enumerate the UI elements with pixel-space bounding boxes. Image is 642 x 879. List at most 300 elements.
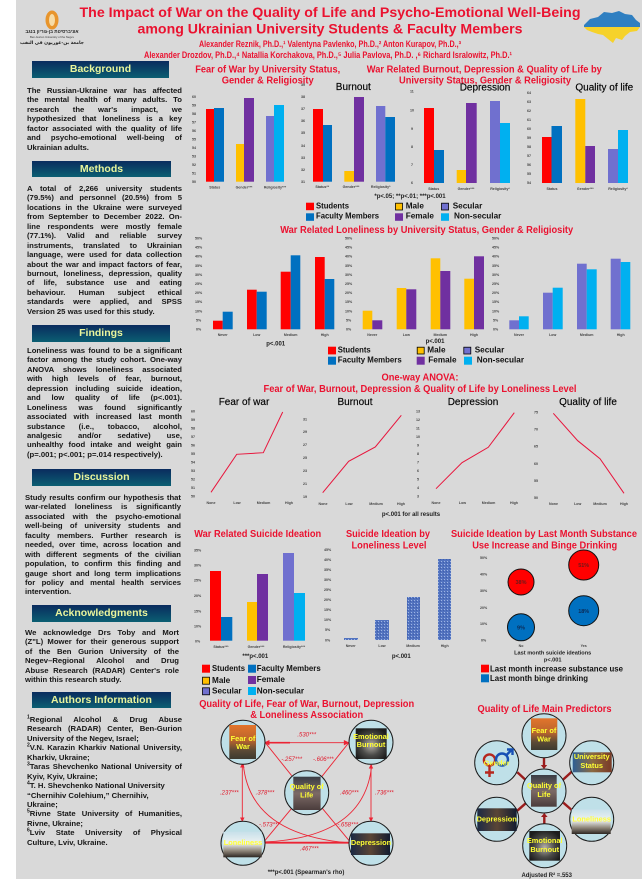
heading: suicide ideation by loneliness	[346, 529, 430, 552]
node: gender: Gender	[484, 758, 510, 768]
bubble chart: suicide ideation by substance use: 30%	[480, 589, 488, 593]
text: author affiliations: 1Regional Alcohol & Drug Abuse	[27, 714, 182, 724]
text: background paragraph: factor associated with the quality of life	[27, 124, 182, 133]
node: quality of life: Quality of	[527, 781, 562, 790]
text: methods paragraph: Version 25 was used for this study.	[27, 307, 155, 316]
line chart: quality of life: Medium	[593, 502, 607, 506]
bar chart: quality of life: 62	[527, 109, 531, 113]
bar chart: quality of life: 60	[527, 127, 531, 131]
node: emotional burnout: Emotional	[527, 836, 563, 845]
text: findings paragraph: Loneliness was found to be a significant	[27, 346, 182, 355]
bar chart: loneliness by gender: 20%	[345, 291, 353, 295]
text: discussion paragraph: faculty members. Further research is	[25, 531, 181, 540]
chart title: Depression	[460, 82, 510, 94]
legend: suicide ideation: Secular	[212, 686, 242, 696]
bubble chart: suicide ideation by substance use: Yes	[581, 644, 587, 648]
chart title: Depression	[448, 397, 498, 408]
text: acknowledgments paragraph: We acknowledge Drs Toby and Mort	[25, 628, 179, 637]
node: loneliness: Loneliness	[572, 814, 611, 824]
bar chart: loneliness by religiosity: 15%	[492, 300, 500, 304]
bar chart: suicide ideation: 15%	[194, 610, 202, 614]
bar chart: quality of life: 58	[527, 145, 531, 149]
node: university status: University	[574, 752, 610, 761]
bar chart: loneliness by gender: Low	[403, 333, 410, 337]
bar chart: fear of war: 54	[192, 146, 196, 150]
legend: loneliness charts	[328, 346, 525, 365]
bar chart: loneliness by religiosity: Medium	[580, 333, 593, 337]
text: author affiliations: Research (RADAR) Center, Ben-Gurion	[27, 724, 182, 733]
text: methods paragraph: A total of 2,266 university students	[27, 184, 182, 193]
section bar: Methods: Methods	[80, 163, 123, 175]
line chart: depression	[416, 397, 518, 505]
bar chart: suicide ideation by loneliness: Never	[346, 644, 356, 648]
bar chart: loneliness by religiosity: 5%	[493, 318, 499, 322]
node: emotional burnout: Burnout	[530, 845, 560, 854]
text: author affiliations: 3Taras Shevchenko National University of	[27, 762, 182, 771]
section bar: Authors Information	[32, 692, 171, 708]
text: findings paragraph: associated with increased last month	[27, 412, 182, 421]
correlation values: .467***	[300, 846, 319, 852]
heading: burnout depression quality of life charts	[367, 64, 602, 86]
node: fear of war: Fear of	[532, 726, 557, 735]
bar chart: loneliness by status: 20%	[195, 291, 203, 295]
section bar: Findings: Findings	[79, 327, 123, 339]
bar chart: loneliness by religiosity: High	[617, 333, 625, 337]
section bar: Background: Background	[70, 63, 131, 75]
icon: flame emblem	[46, 10, 58, 30]
legend: top charts: Male	[406, 202, 424, 210]
bubble chart: suicide ideation by substance use: p<.001	[544, 657, 561, 663]
section bar: Discussion	[32, 469, 171, 486]
note: Spearman: ***p<.001 (Spearman's rho)	[268, 870, 344, 876]
text: author affiliations: Culture, Lviv, Ukraine.	[27, 838, 108, 847]
heading: one-way ANOVA: One-way ANOVA:	[382, 372, 458, 384]
correlation values	[220, 732, 394, 852]
bar chart: fear of war: Religiosity***	[264, 186, 287, 190]
text: discussion paragraph: with different segments of the civilian	[25, 550, 181, 559]
heading: fear of war chart: Fear of War by University Status,	[195, 64, 340, 76]
line chart: burnout: 27	[303, 443, 307, 447]
text: discussion paragraph: war-related loneliness is significantly	[25, 502, 181, 511]
correlation values: .237***	[220, 790, 239, 796]
line chart: fear of war: 57	[191, 435, 195, 439]
bar chart: burnout	[301, 82, 395, 189]
text: author affiliations: 5Rivne State University of Humanities,	[27, 809, 182, 818]
bar chart: loneliness by gender: Never	[367, 333, 378, 337]
bar chart: depression: Religiosity*	[490, 187, 510, 191]
logo: Ben-Gurion University: جامعة بن-غوريون في النقب	[20, 41, 84, 46]
bar chart: loneliness by status: 25%	[195, 282, 203, 286]
line chart: fear of war: 60	[191, 410, 195, 414]
text: findings paragraph: depression including suicide ideation,	[27, 384, 182, 393]
text: author affiliations: Rivne, Ukraine;	[27, 819, 83, 828]
heading: suicide ideation by loneliness: Loneliness Level	[352, 540, 427, 552]
bar chart: loneliness by gender: 15%	[345, 300, 353, 304]
node: quality of life: Quality of	[290, 782, 324, 791]
bubble chart: suicide ideation by substance use: 20%	[480, 606, 488, 610]
bar chart: loneliness by gender: High	[470, 333, 478, 337]
text: acknowledgments paragraph: Negev–Regional Alcohol and Drug	[25, 656, 179, 665]
node: fear of war	[221, 720, 265, 764]
text: findings paragraph: factor among the study cohort. One-way	[27, 355, 182, 364]
heading: suicide ideation: War Related Suicide Ideation	[194, 529, 321, 540]
bar chart: fear of war: 56	[192, 129, 196, 133]
bar chart: loneliness by religiosity: Never	[514, 333, 525, 337]
line chart: depression: Medium	[482, 501, 495, 505]
chart title: Quality of life	[559, 397, 617, 408]
bubble chart: suicide ideation by substance use	[480, 550, 599, 663]
line chart: depression: 5	[417, 478, 419, 482]
line chart: depression: 11	[416, 426, 420, 430]
text: methods paragraph: (79.5%) and personnel (20.5%) from 5	[27, 193, 182, 202]
bar chart: burnout: 35	[301, 131, 305, 135]
bar chart: quality of life: Status	[547, 187, 557, 191]
node: emotional burnout	[349, 720, 393, 764]
node: university status: Status	[580, 761, 603, 770]
line chart: burnout: Medium	[369, 502, 383, 506]
node: quality of life	[522, 769, 566, 813]
p value: status: p<.001	[266, 342, 286, 348]
line chart: quality of life: 65	[534, 444, 538, 448]
bar chart: loneliness by gender: Medium	[434, 333, 447, 337]
section bar: Findings	[32, 325, 170, 342]
legend: suicide ideation: Students	[212, 664, 245, 673]
line chart: depression: High	[510, 501, 518, 505]
bar chart: suicide ideation by loneliness: 45%	[324, 548, 332, 552]
icon: female and male symbols	[484, 750, 512, 777]
text: methods paragraph: line respondents were mostly female	[27, 222, 182, 231]
bar chart: suicide ideation: 30%	[194, 564, 202, 568]
correlation values: -.606***	[313, 757, 334, 763]
legend: loneliness charts: Faculty Members	[338, 356, 402, 364]
node: fear of war: War	[236, 742, 250, 751]
line chart: fear of war: 59	[191, 418, 195, 422]
legend: substance use: Last month binge drinking	[490, 674, 588, 683]
line chart: depression: 7	[417, 460, 419, 464]
line chart: depression: 13	[416, 410, 420, 414]
text: methods paragraph: behaviour. Human subject ethical	[27, 288, 182, 297]
bar chart: loneliness by status	[195, 236, 334, 337]
text: acknowledgments paragraph: within this research study.	[25, 675, 121, 684]
authors	[144, 39, 512, 60]
bar chart: burnout: 37	[301, 107, 305, 111]
chart title: Burnout	[336, 82, 371, 93]
legend: suicide ideation: Non-secular	[257, 686, 305, 696]
bar chart: burnout: 31	[301, 180, 305, 184]
bar chart: suicide ideation by loneliness: 15%	[324, 608, 332, 612]
bar chart: fear of war: 60	[192, 95, 196, 99]
line chart: burnout: 21	[303, 482, 307, 486]
chart title: Quality of life	[575, 82, 634, 94]
bar chart: loneliness by religiosity: 20%	[492, 291, 500, 295]
bar chart: burnout: Religiosity*	[371, 185, 391, 189]
node: depression	[475, 797, 519, 841]
bar chart: loneliness by gender: 35%	[345, 264, 353, 268]
line chart: burnout: High	[397, 502, 405, 506]
heading: burnout depression quality of life charts: University Status, Gender & Religiosity	[399, 76, 571, 86]
text: background paragraph: Ukrainian adults.	[27, 143, 89, 152]
node: quality of life: Life	[300, 790, 313, 800]
text: author affiliations: University of the Negev, Israel;	[27, 734, 139, 743]
bar chart: burnout: 36	[301, 119, 305, 123]
bar chart: loneliness by religiosity: 30%	[492, 273, 500, 277]
bar chart: fear of war: 50	[192, 180, 196, 184]
bar chart: suicide ideation: 35%	[194, 548, 202, 552]
text: methods paragraph: locations in the Ukraine were surveyed	[27, 203, 182, 212]
line chart: depression: None	[432, 501, 440, 505]
bar chart: burnout: 33	[301, 156, 305, 160]
text: discussion paragraph: needed, over time, across location and	[25, 540, 181, 549]
text: findings paragraph: ANOVA shows loneliness associated	[27, 365, 182, 374]
bar chart: loneliness by gender	[345, 236, 484, 337]
legend: top charts: Female	[406, 212, 434, 221]
node: loneliness	[570, 797, 614, 841]
text: discussion paragraph: for policy and mental health services	[25, 578, 181, 587]
bar chart: quality of life: 61	[527, 118, 531, 122]
bar chart: loneliness by religiosity: Low	[549, 333, 556, 337]
bar chart: fear of war	[192, 95, 287, 190]
heading: substance use and binge drinking: Use Increase and Binge Drinking	[472, 540, 617, 552]
legend: loneliness charts: Male	[427, 346, 446, 354]
bar chart: quality of life: 64	[527, 91, 531, 95]
section bar: Authors Information: Authors Information	[51, 694, 152, 706]
node: fear of war	[522, 714, 566, 758]
bubble chart: suicide ideation by substance use: 18%	[578, 609, 589, 615]
bar chart: quality of life	[527, 82, 634, 191]
bar chart: depression	[410, 82, 510, 191]
node: loneliness: Loneliness	[224, 838, 262, 847]
text: background paragraph: research the war's impact, we	[27, 105, 182, 114]
text: author affiliations: 2V.N. Karazin Kharkiv National University,	[27, 743, 182, 752]
logo: Ben-Gurion University: אוניברסיטת בן-גוריון בנגב	[25, 29, 79, 34]
line chart: depression: 9	[417, 444, 419, 448]
node: emotional burnout: Burnout	[357, 740, 386, 749]
text: methods paragraph: burnout, loneliness, depression, quality	[27, 269, 182, 278]
chart title: Burnout	[337, 397, 373, 408]
bar chart: depression: 9	[411, 127, 413, 131]
legend: loneliness charts: Students	[338, 346, 371, 354]
bar chart: quality of life: Gender***	[577, 187, 594, 191]
bar chart: quality of life: Religiosity*	[608, 187, 628, 191]
bar chart: loneliness by religiosity: 25%	[492, 282, 500, 286]
text: author affiliations: Ukraine;	[27, 800, 58, 809]
bar chart: burnout: 39	[301, 83, 305, 87]
bar chart: fear of war: 58	[192, 112, 196, 116]
text: discussion paragraph: population, to confirm this finding and	[25, 559, 181, 568]
bar chart: depression: Status	[428, 187, 439, 191]
text: methods paragraph	[27, 184, 182, 316]
text: author affiliations: Kharkiv, Ukraine;	[27, 753, 90, 762]
bar chart: burnout: 38	[301, 95, 305, 99]
line chart: fear of war: Medium	[257, 501, 270, 505]
bar chart: loneliness by gender: 40%	[345, 255, 353, 259]
bar chart: loneliness by status: 50%	[195, 236, 203, 240]
correlation values: .378***	[256, 790, 275, 796]
line chart: burnout: 25	[303, 456, 307, 460]
bar chart: quality of life: 57	[527, 154, 531, 158]
text: findings paragraph	[27, 346, 182, 459]
bar chart: loneliness by status: 5%	[196, 318, 202, 322]
line chart: fear of war: 56	[191, 444, 195, 448]
line chart: fear of war: 52	[191, 478, 195, 482]
text: methods paragraph: standards were applied, and SPSS	[27, 297, 182, 306]
icon: Ukraine flag map	[584, 11, 640, 43]
bar chart: loneliness by status: Low	[253, 333, 260, 337]
bar chart: loneliness by religiosity: 40%	[492, 255, 500, 259]
section bar: Background	[32, 61, 169, 78]
line chart: fear of war: 53	[191, 469, 195, 473]
bar chart: fear of war: 59	[192, 104, 196, 108]
bar chart: suicide ideation by loneliness: 35%	[324, 568, 332, 572]
text: discussion paragraph: Study results confirm our hypothesis that	[25, 493, 181, 502]
title: The Impact of War on the Quality of Life and Psycho-Emotional Well-Being	[80, 5, 580, 20]
text: discussion paragraph: intervention.	[25, 587, 71, 596]
bar chart: suicide ideation by loneliness: 0%	[325, 638, 331, 642]
text: author affiliations: 4T. H. Shevchenko National University	[27, 780, 165, 790]
section bar: Methods	[32, 161, 171, 177]
bar chart: suicide ideation: Gender***	[248, 645, 265, 649]
legend: suicide ideation: Faculty Members	[257, 664, 321, 673]
line chart: quality of life: 75	[534, 410, 538, 414]
heading: one-way ANOVA: Fear of War, Burnout, Depression & Quality of Life by Loneliness Level	[264, 384, 577, 395]
node: fear of war: War	[537, 734, 551, 744]
bar chart: loneliness by gender: 45%	[345, 246, 353, 250]
section bar: Discussion: Discussion	[73, 471, 130, 483]
bar chart: fear of war: 55	[192, 138, 196, 142]
bar chart: suicide ideation: 10%	[194, 624, 202, 628]
logo: Ben-Gurion University: Ben-Gurion University of the Negev	[30, 35, 75, 39]
bubble chart: suicide ideation by substance use: 10%	[480, 622, 488, 626]
bar chart: burnout: Gender***	[343, 185, 360, 189]
title: among Ukrainian University Students & Faculty Members	[138, 22, 522, 36]
node: depression	[349, 821, 393, 865]
bar chart: loneliness by status: High	[321, 333, 329, 337]
authors: Alexander Reznik, Ph.D.,¹ Valentyna Pavlenko, Ph.D.,² Anton Kurapov, Ph.D.,³	[199, 39, 461, 49]
legend: loneliness charts: Non-secular	[477, 356, 525, 364]
line chart: depression: 6	[417, 469, 419, 473]
text: author affiliations: Kyiv, Kyiv, Ukraine;	[27, 772, 98, 781]
correlation values: .736***	[375, 790, 394, 796]
bar chart: fear of war: 52	[192, 163, 196, 167]
node: emotional burnout: Emotional	[353, 732, 389, 741]
bar chart: burnout: 34	[301, 144, 305, 148]
text: discussion paragraph: gauge short and long term implications	[25, 568, 181, 578]
correlation values: .460***	[340, 790, 359, 796]
bar chart: loneliness by status: 30%	[195, 273, 203, 277]
line chart: quality of life: 55	[534, 479, 538, 483]
bar chart: suicide ideation by loneliness: 30%	[324, 578, 332, 582]
line chart: burnout: 19	[303, 495, 307, 499]
bar chart: suicide ideation: 25%	[194, 578, 202, 582]
bar chart: suicide ideation: 0%	[195, 640, 201, 644]
node: quality of life: Life	[537, 790, 551, 799]
bar chart: depression: 7	[411, 163, 413, 167]
heading: loneliness: War Related Loneliness by University Status, Gender & Religiosity	[280, 225, 574, 236]
network diagram: main predictors	[475, 714, 614, 868]
bar chart: suicide ideation: Status***	[213, 645, 229, 649]
line chart: fear of war: 50	[191, 494, 195, 498]
bar chart: suicide ideation by loneliness: Medium	[406, 644, 420, 648]
bar chart: quality of life: 63	[527, 100, 531, 104]
bar chart: loneliness by religiosity	[492, 236, 630, 337]
line chart: depression: Low	[459, 501, 466, 505]
node: gender	[475, 741, 519, 785]
legend: substance use	[481, 664, 623, 683]
bar chart: suicide ideation by loneliness: High	[441, 644, 449, 648]
heading: association network	[199, 699, 414, 721]
bar chart: loneliness by status: 45%	[195, 246, 203, 250]
chart title: Fear of war	[219, 397, 270, 408]
bubble chart: suicide ideation by substance use: 0%	[481, 638, 487, 642]
p value: gender: p<.001	[426, 339, 445, 345]
bar chart: loneliness by status: 15%	[195, 300, 203, 304]
line chart: quality of life: 60	[534, 462, 538, 466]
correlation values: .530***	[297, 732, 317, 738]
text: background paragraph: the mental health of many adults. To	[27, 95, 182, 104]
bar chart: fear of war: Status	[209, 186, 220, 190]
line chart: quality of life: 70	[534, 428, 538, 432]
line chart: burnout: 29	[303, 430, 307, 434]
bar chart: loneliness by gender: 50%	[345, 236, 353, 240]
bubble chart: suicide ideation by substance use: No	[519, 644, 524, 648]
bar chart: loneliness by gender: 25%	[345, 282, 353, 286]
correlation values: -.257***	[281, 757, 303, 763]
heading: association network: & Loneliness Association	[250, 710, 363, 721]
title	[80, 5, 580, 36]
bar chart: loneliness by status: 10%	[195, 309, 203, 313]
bar chart: depression: 8	[411, 145, 413, 149]
node: emotional burnout	[523, 824, 567, 868]
bubble chart: suicide ideation by substance use: 50%	[480, 556, 488, 560]
p value: loneliness level: p<.001	[392, 654, 411, 660]
text: background paragraph: The Russian-Ukraine war has affected	[27, 86, 182, 95]
bar chart: suicide ideation by loneliness: 10%	[324, 618, 332, 622]
heading: association network: Quality of Life, Fear of War, Burnout, Depression	[199, 699, 414, 710]
heading: substance use and binge drinking	[451, 529, 637, 552]
bar chart: loneliness by status: 35%	[195, 264, 203, 268]
text: methods paragraph: language, were used for data collection	[27, 250, 182, 259]
text: discussion paragraph	[25, 493, 181, 596]
legend: top charts: Students	[316, 202, 349, 210]
bar chart: quality of life: 54	[527, 181, 531, 185]
bar chart: fear of war: 51	[192, 172, 196, 176]
p value: suicide ideation: ***p<.001	[242, 654, 269, 660]
arrows	[241, 741, 372, 843]
text: acknowledgments paragraph: (Z"L) Mower for their generous support	[25, 637, 179, 646]
line chart: fear of war: None	[207, 501, 215, 505]
text: findings paragraph: analgesic and/or sedative) use,	[27, 431, 182, 440]
text: author affiliations	[27, 714, 182, 847]
heading: fear of war chart	[195, 64, 340, 86]
bar chart: loneliness by status: Never	[218, 333, 228, 337]
bar chart: loneliness by gender: 5%	[346, 318, 352, 322]
node: university status	[570, 741, 614, 785]
bar chart: loneliness by status: Medium	[284, 333, 297, 337]
p value: line charts: p<.001 for all results	[382, 512, 441, 518]
bar chart: fear of war: Gender***	[236, 186, 253, 190]
line chart: quality of life	[534, 397, 628, 506]
bubble chart: suicide ideation by substance use: 9%	[517, 626, 525, 632]
bar chart: suicide ideation	[194, 548, 306, 649]
line chart: burnout: 31	[303, 418, 307, 422]
line chart: burnout: Low	[345, 502, 353, 506]
text: acknowledgments paragraph: of the Ben Gurion University of the	[25, 647, 179, 656]
text: methods paragraph: from September to December 2022. On-	[27, 212, 182, 221]
bar chart: suicide ideation: Religiosity***	[283, 645, 306, 649]
line chart: depression: 8	[417, 452, 419, 456]
line chart: depression: 10	[416, 435, 420, 439]
significance note: *p<.05; **p<.01; ***p<.001	[374, 194, 446, 200]
